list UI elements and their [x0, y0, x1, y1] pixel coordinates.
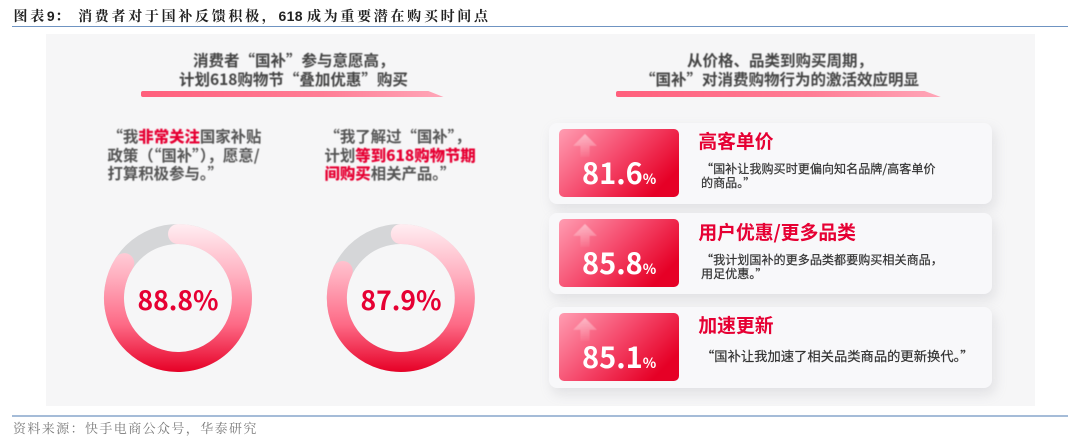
- stat box: 81.6%: [559, 129, 679, 197]
- quote: waiting for 618: “我了解过“国补”，: [324, 125, 471, 147]
- quote: waiting for 618: 间购买相关产品。”: [324, 162, 455, 184]
- icon: up arrow: [574, 224, 596, 246]
- card text: [701, 251, 943, 282]
- card text: “我计划国补的更多品类都要购买相关商品，: [701, 251, 943, 268]
- source note: 资料来源：快手电商公众号，华泰研究: [13, 418, 258, 437]
- value: 85.1%: [582, 335, 656, 377]
- heading: right: 从价格、品类到购买周期，: [687, 49, 873, 71]
- quote: attention to subsidy: 政策（“国补”），愿意/: [108, 144, 260, 166]
- card: user discount / more categories: [549, 213, 992, 294]
- donut value: 88.8%: 88.8%: [137, 279, 219, 318]
- heading: right: [640, 49, 920, 90]
- quote: attention to subsidy: “我非常关注国家补贴: [108, 125, 261, 147]
- quote: waiting for 618: [324, 125, 476, 184]
- heading: left: [178, 49, 408, 90]
- card text: 用足优惠。”: [701, 265, 768, 282]
- heading underline: right: [616, 91, 941, 97]
- card text: [701, 160, 936, 191]
- heading: left: 计划618购物节“叠加优惠”购买: [179, 68, 408, 90]
- card text: “国补让我加速了相关品类商品的更新换代。”: [701, 346, 974, 364]
- heading: left: 消费者“国补”参与意愿高，: [193, 49, 395, 71]
- top rule: [12, 26, 1068, 27]
- donut value: 87.9%: 87.9%: [360, 279, 442, 318]
- quote: waiting for 618: 计划等到618购物节期: [324, 144, 476, 166]
- card: high unit price: [549, 123, 992, 204]
- card text: “国补让我购买时更偏向知名品牌/高客单价: [701, 160, 936, 177]
- value: 81.6%: [582, 151, 656, 193]
- stat box: 85.8%: [559, 219, 679, 287]
- quote: attention to subsidy: [107, 125, 262, 184]
- icon: up arrow: [574, 134, 596, 156]
- card title: 高客单价: [698, 127, 774, 154]
- bottom rule: [12, 415, 1068, 417]
- panel: infographic background: [46, 34, 1035, 406]
- icon: up arrow: [574, 318, 596, 340]
- card: faster renewal: [549, 307, 992, 388]
- value: 85.8%: [582, 241, 656, 283]
- stat box: 85.1%: [559, 313, 679, 381]
- title: 图表9： 消费者对于国补反馈积极，618 成为重要潜在购买时间点: [14, 6, 491, 26]
- card text: 的商品。”: [701, 174, 755, 191]
- donut: 88.8%: [114, 234, 242, 362]
- donut: 87.9%: [337, 234, 465, 362]
- card title: 加速更新: [698, 311, 774, 338]
- card title: 用户优惠/更多品类: [698, 218, 856, 245]
- heading underline: left: [140, 91, 444, 97]
- heading: right: “国补”对消费购物行为的激活效应明显: [640, 68, 919, 90]
- quote: attention to subsidy: 打算积极参与。”: [108, 162, 223, 184]
